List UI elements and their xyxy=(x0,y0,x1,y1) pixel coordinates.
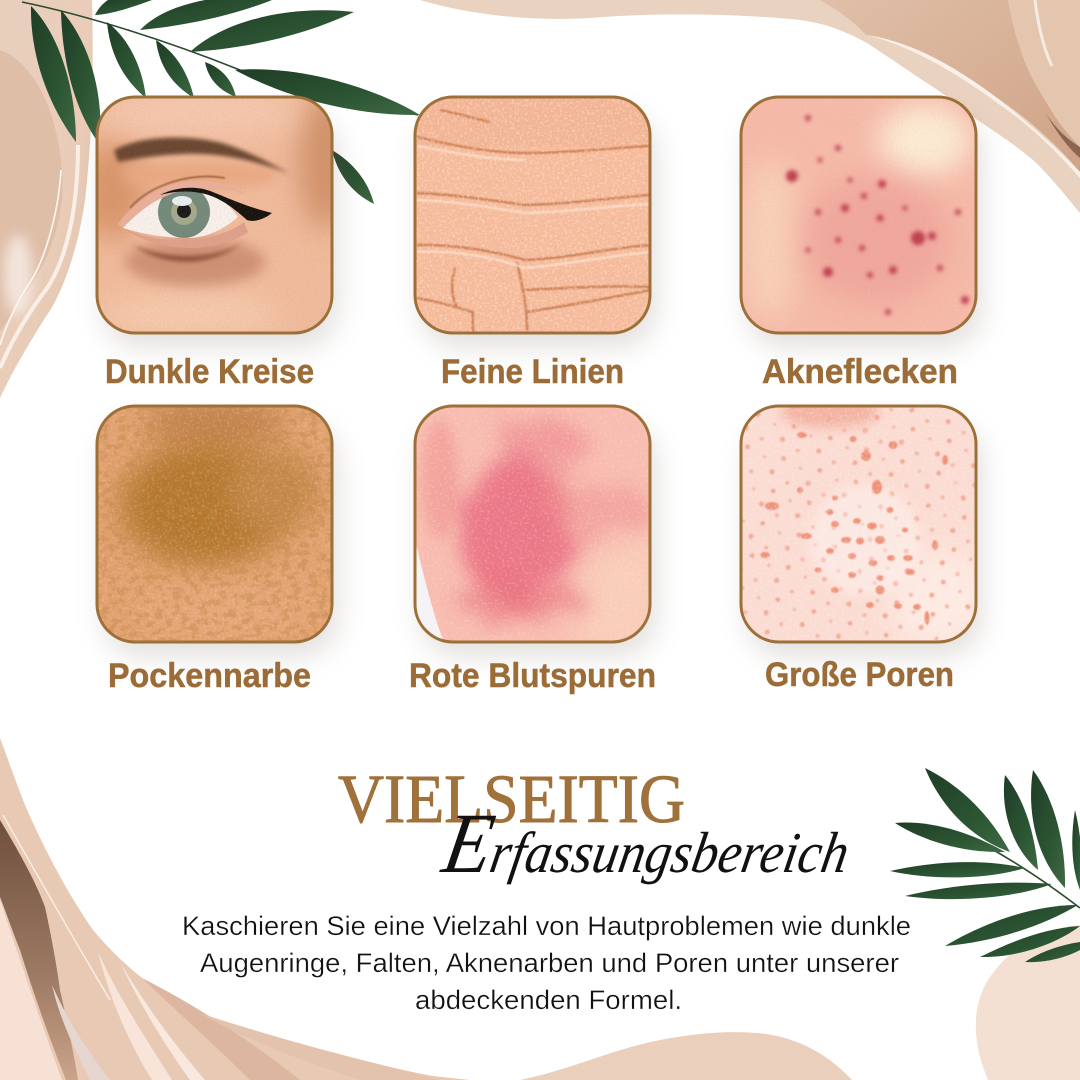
cream swirl: left xyxy=(0,0,93,398)
cream swirl: top right xyxy=(420,0,1080,213)
cream swirl: bottom left xyxy=(0,738,852,1080)
eyeliner xyxy=(160,188,272,221)
body text: abdeckenden Formel. xyxy=(415,985,682,1015)
eyebrow xyxy=(114,138,290,174)
cream blob: bottom right xyxy=(976,925,1080,1080)
eyelid xyxy=(118,181,248,228)
panel: large pores photo xyxy=(740,404,978,644)
label: Große Poren: Große Poren xyxy=(765,656,954,694)
label: Rote Blutspuren: Rote Blutspuren xyxy=(409,657,656,695)
leaves: top left xyxy=(22,0,420,204)
panel: acne marks photo xyxy=(740,97,976,333)
eye xyxy=(123,189,238,238)
leaves: bottom right xyxy=(890,768,1080,962)
under-eye dark circle xyxy=(125,238,265,286)
card shadows xyxy=(103,115,982,656)
panel: dark circles eye photo xyxy=(96,96,334,334)
panel: fine lines photo xyxy=(415,97,650,333)
panel: pockmark scar photo xyxy=(97,399,332,642)
heading script: Erfassungsbereich: Erfassungsbereich xyxy=(435,796,858,891)
body text: Augenringe, Falten, Aknenarben und Poren unter unserer xyxy=(200,948,899,978)
label: Akneflecken: Akneflecken xyxy=(762,353,958,391)
panel: red marks photo xyxy=(415,406,660,650)
label: Feine Linien: Feine Linien xyxy=(441,353,624,391)
label: Dunkle Kreise: Dunkle Kreise xyxy=(105,353,314,391)
body text: Kaschieren Sie eine Vielzahl von Hautproblemen wie dunkle xyxy=(182,911,911,941)
heading: VIELSEITIG: VIELSEITIG xyxy=(338,761,685,837)
body text xyxy=(182,911,911,1015)
label: Pockennarbe: Pockennarbe xyxy=(108,657,311,695)
